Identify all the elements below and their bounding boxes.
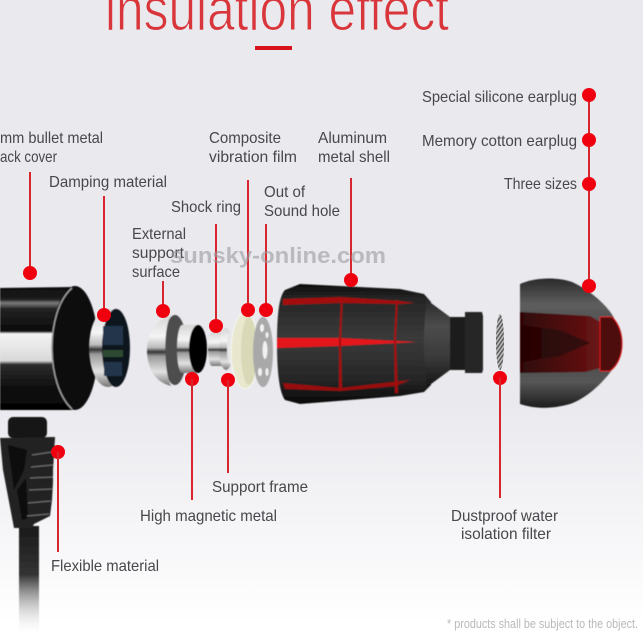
callout: high magnetic metal: High magnetic metal xyxy=(140,508,277,525)
callout: composite vibration film: Composite xyxy=(209,130,281,147)
part: aluminum metal shell xyxy=(277,284,483,404)
part: silicone earplug xyxy=(520,278,622,408)
callout: flexible material: Flexible material xyxy=(51,558,159,575)
part: external support surface xyxy=(147,315,207,386)
part: damping material circuit board xyxy=(89,309,130,387)
watermark: sunsky-online.com xyxy=(170,243,386,268)
part: back cover cylinder xyxy=(0,286,98,410)
callout: dustproof water isolation filter: Dustproof water xyxy=(451,508,559,525)
callout: earplug options: Special silicone earplug xyxy=(422,89,577,106)
part: cable connector and wire xyxy=(0,417,55,634)
callout: external support surface xyxy=(132,226,186,318)
callout: back cover xyxy=(0,130,103,280)
callout: dustproof water isolation filter: isolation filter xyxy=(461,526,552,543)
callout: damping material: Damping material xyxy=(49,174,167,191)
callout: aluminum metal shell xyxy=(318,130,390,287)
callout: composite vibration film: vibration film xyxy=(209,149,297,166)
part: shock ring xyxy=(208,328,233,370)
callout: support frame: Support frame xyxy=(212,479,308,496)
callout: earplug options xyxy=(422,88,596,293)
callout: dustproof water isolation filter xyxy=(451,371,559,543)
callout: shock ring: Shock ring xyxy=(171,199,241,216)
callout: external support surface: surface xyxy=(132,264,180,281)
title underline xyxy=(255,46,292,50)
callout: external support surface: External xyxy=(132,226,186,243)
callout: out of sound hole: Sound hole xyxy=(264,203,340,220)
callout: high magnetic metal xyxy=(140,372,277,525)
callout: back cover: ack cover xyxy=(0,149,58,166)
callout: external support surface: support xyxy=(132,245,185,262)
callout: aluminum metal shell: Aluminum xyxy=(318,130,387,147)
part: dustproof water isolation filter xyxy=(496,314,504,370)
part: out of sound hole disk xyxy=(253,317,273,387)
callout: earplug options: Three sizes xyxy=(504,176,577,193)
callout: earplug options: Memory cotton earplug xyxy=(422,133,577,150)
callout: composite vibration film xyxy=(209,130,297,317)
part: composite vibration film xyxy=(231,313,259,389)
callout: out of sound hole xyxy=(259,184,340,317)
callout: flexible material xyxy=(51,445,159,575)
callout: aluminum metal shell: metal shell xyxy=(318,149,390,166)
callout: damping material xyxy=(49,174,167,322)
callout: out of sound hole: Out of xyxy=(264,184,306,201)
callout: back cover: mm bullet metal xyxy=(0,130,103,147)
callout: support frame xyxy=(212,373,308,496)
callout: shock ring xyxy=(171,199,241,333)
